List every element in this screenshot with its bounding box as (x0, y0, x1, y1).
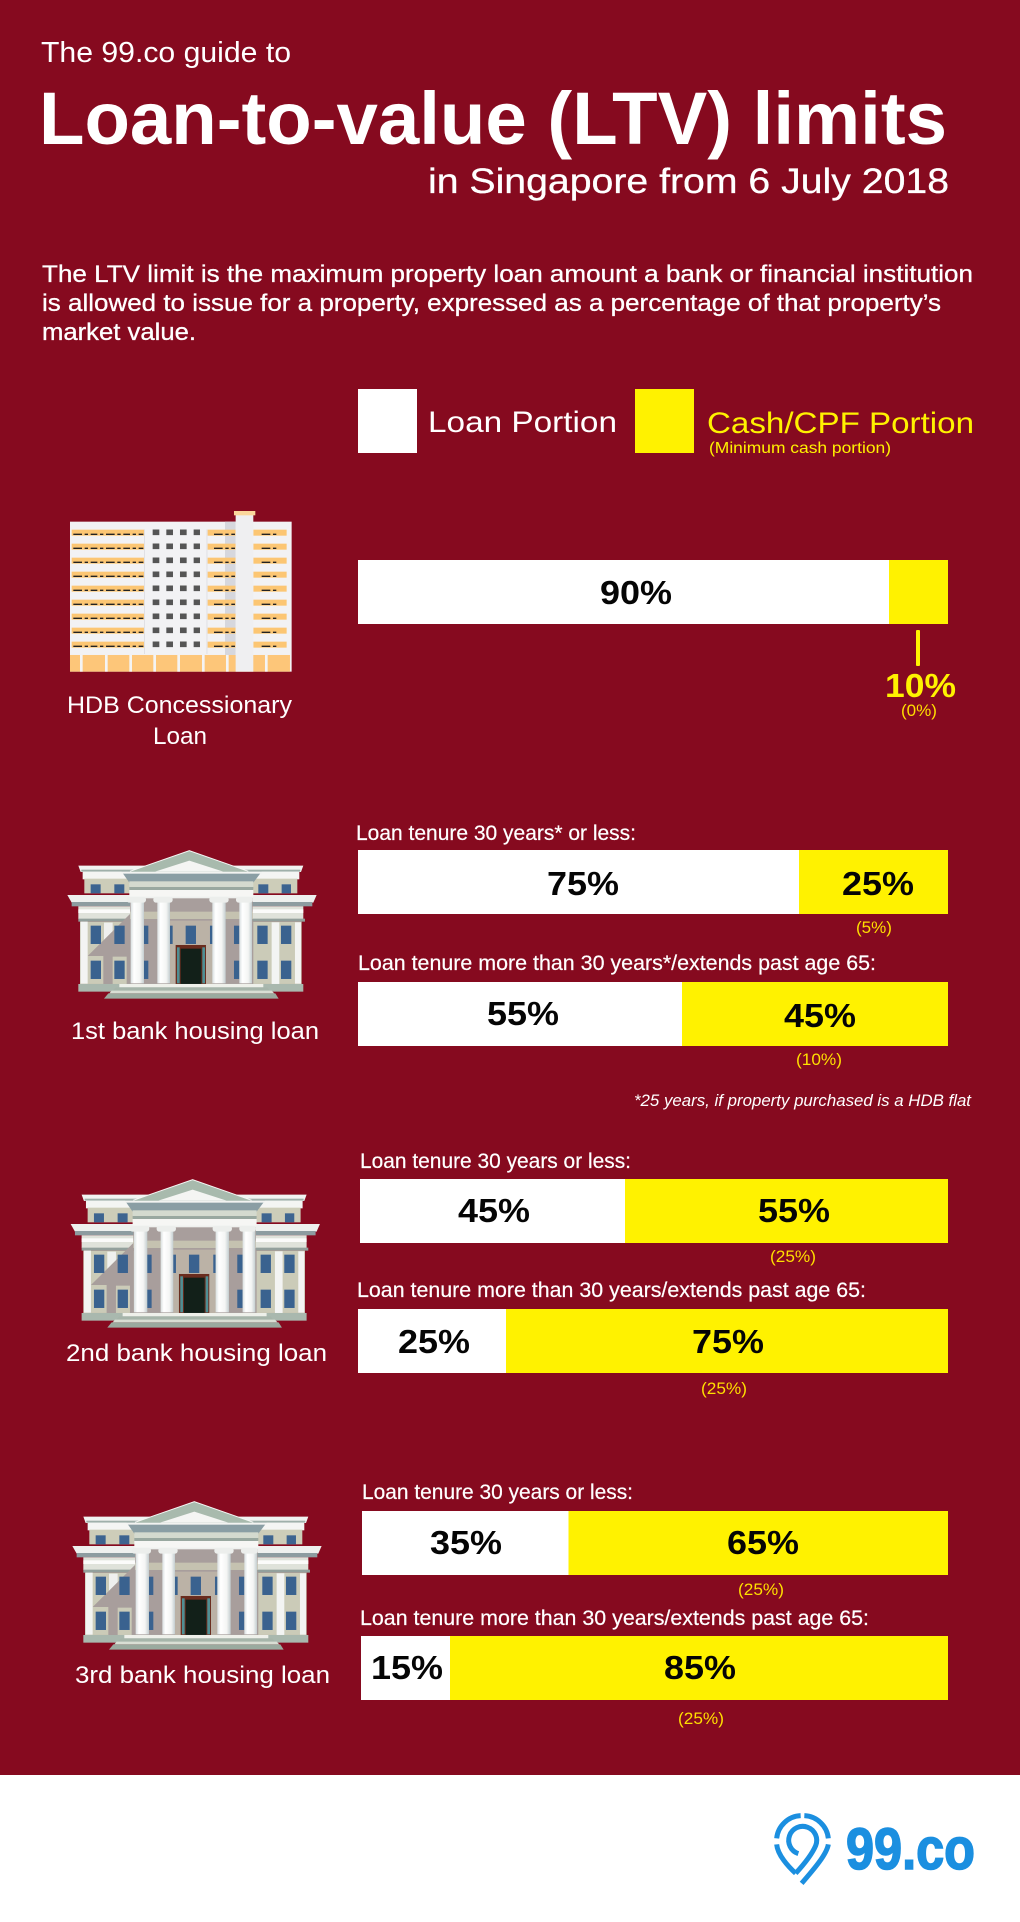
tenure label: Loan tenure more than 30 years/extends past age 65: (360, 1607, 869, 1630)
header (39, 37, 949, 201)
legend swatch: cash (635, 389, 694, 453)
icon: bank, 1st loan (67, 851, 317, 999)
bar: 3rd loan 35/65 (362, 1511, 948, 1575)
icon: location pin (777, 1816, 828, 1883)
label: 3rd bank housing loan: 3rd bank housing loan (75, 1662, 330, 1689)
intro paragraph: The LTV limit is the maximum property loan amount a bank or financial institution (42, 261, 973, 288)
label: HDB concessionary loan: HDB Concessionary (67, 692, 292, 719)
legend label: cash: Cash/CPF Portion (707, 407, 974, 440)
intro paragraph: market value. (42, 319, 196, 346)
eyebrow text: The 99.co guide to (41, 37, 291, 69)
legend swatch: loan (358, 389, 417, 453)
icon: bank, 3rd loan (72, 1502, 322, 1650)
bar: 1st loan 55/45: 45% (784, 997, 856, 1034)
subtitle: in Singapore from 6 July 2018 (428, 162, 949, 201)
bar: HDB 90/10 (358, 560, 948, 624)
label: HDB concessionary loan (67, 692, 292, 750)
bar: 2nd loan 45/55: 45% (458, 1192, 530, 1229)
tenure label: Loan tenure more than 30 years/extends past age 65: (357, 1279, 866, 1302)
bar: 1st loan 75/25 (358, 850, 948, 914)
icon: HDB flat (70, 511, 292, 672)
bar: HDB 90/10: 90% (600, 574, 672, 611)
title: Loan-to-value (LTV) limits (39, 77, 947, 160)
bar: 2nd loan 25/75: 75% (692, 1323, 764, 1360)
intro paragraph: is allowed to issue for a property, expressed as a percentage of that property’s (42, 290, 941, 317)
bar: 2nd loan 25/75 (358, 1309, 948, 1373)
footnote: *25 years, if property purchased is a HDB flat (634, 1091, 972, 1110)
tenure label: Loan tenure 30 years* or less: (356, 822, 636, 845)
minimum cash note: (25%) (738, 1580, 784, 1599)
minimum cash note: (10%) (796, 1050, 842, 1069)
callout: HDB cash 10% (885, 630, 956, 720)
bar: 3rd loan 35/65: 65% (727, 1524, 799, 1561)
minimum cash note: (25%) (770, 1247, 816, 1266)
legend (358, 389, 974, 457)
tenure label: Loan tenure 30 years or less: (362, 1481, 633, 1504)
minimum cash note: (25%) (678, 1709, 724, 1728)
bar: 3rd loan 15/85: 85% (664, 1649, 736, 1686)
bar: 1st loan 75/25: 25% (842, 865, 914, 902)
callout: HDB cash 10%: 10% (885, 667, 956, 704)
legend note: (Minimum cash portion) (709, 440, 891, 457)
bar: 3rd loan 35/65: 35% (430, 1524, 502, 1561)
bar: 3rd loan 15/85: 15% (371, 1649, 443, 1686)
icon: bank, 2nd loan (71, 1180, 320, 1328)
bar: 1st loan 55/45 (358, 982, 948, 1046)
label: 2nd bank housing loan: 2nd bank housing loan (66, 1340, 327, 1367)
footer band (0, 1775, 1020, 1922)
logo: 99.co (777, 1816, 975, 1883)
minimum cash note: (5%) (856, 918, 892, 937)
callout: HDB cash 10%: (0%) (901, 701, 937, 720)
wordmark: 99.co (846, 1817, 975, 1882)
intro paragraph (42, 261, 973, 346)
label: HDB concessionary loan: Loan (153, 723, 207, 750)
bar: 2nd loan 25/75: 25% (398, 1323, 470, 1360)
minimum cash note: (25%) (701, 1379, 747, 1398)
bar: 3rd loan 15/85 (361, 1636, 948, 1700)
bar: 2nd loan 45/55: 55% (758, 1192, 830, 1229)
tenure label: Loan tenure 30 years or less: (360, 1150, 631, 1173)
bar: 1st loan 75/25: 75% (547, 865, 619, 902)
bar: 1st loan 55/45: 55% (487, 995, 559, 1032)
legend label: loan: Loan Portion (428, 406, 617, 439)
tenure label: Loan tenure more than 30 years*/extends past age 65: (358, 952, 876, 975)
label: 1st bank housing loan: 1st bank housing loan (71, 1018, 319, 1045)
bar: 2nd loan 45/55 (360, 1179, 948, 1243)
